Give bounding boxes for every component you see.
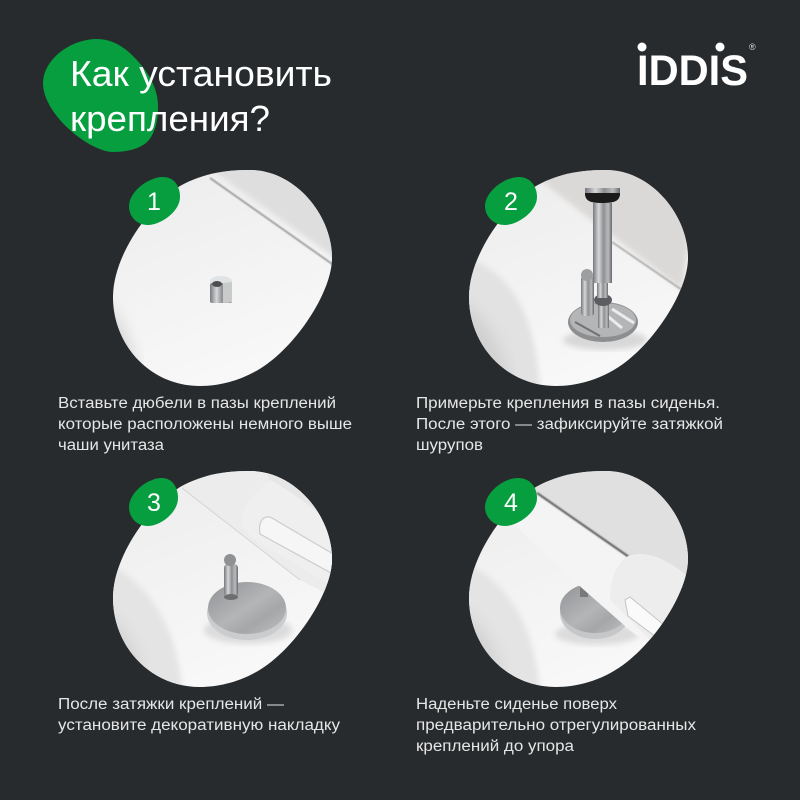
badge 1 [129, 177, 180, 225]
badge 1: 1 [147, 188, 161, 216]
title [43, 39, 332, 152]
photo: dowel on toilet rim [113, 170, 332, 386]
icon: screw [598, 302, 609, 328]
photo: seat fitted over fixing [469, 471, 688, 687]
icon: screwdriver [597, 282, 608, 298]
panel: step 4 [416, 465, 700, 755]
step 2 text: шурупов [416, 437, 483, 454]
icon: mounting plate [568, 302, 638, 342]
title text: крепления? [70, 98, 270, 139]
panel: step 3 [58, 465, 340, 734]
step 4 text: креплений до упора [416, 738, 574, 755]
badge 4: 4 [504, 489, 518, 517]
badge 2: 2 [504, 188, 518, 216]
logo: ® [749, 42, 756, 52]
panel: step 2 [416, 160, 723, 454]
photo: cover plate [113, 471, 332, 687]
icon: hinge [626, 554, 686, 640]
icon: round cover [560, 610, 625, 639]
step 2 text: Примерьте крепления в пазы сиденья. [416, 395, 720, 412]
step 2 text: После этого — зафиксируйте затяжкой [416, 416, 723, 433]
badge 2 [485, 177, 537, 225]
badge 3 [129, 478, 178, 526]
title text: Как установить [70, 53, 332, 94]
step 1 text: чаши унитаза [58, 437, 164, 454]
icon: hinge [267, 473, 332, 582]
badge 4 [485, 478, 537, 526]
upper surface [534, 471, 688, 589]
photo: screwdriver and fixing [469, 170, 688, 386]
title green blob [43, 39, 158, 152]
icon: post [581, 276, 594, 316]
panel: step 1 [58, 160, 352, 454]
icon: post [224, 564, 238, 597]
badge 3: 3 [147, 489, 161, 517]
step 3 text: установите декоративную накладку [58, 717, 340, 734]
step 4 text: Наденьте сиденье поверх [416, 696, 617, 713]
icon: dowel [210, 276, 232, 303]
step 1 text: Вставьте дюбели в пазы креплений [58, 395, 336, 412]
step 1 text: которые расположены немного выше [58, 416, 352, 433]
icon: round cover [207, 608, 287, 640]
icon: seat arm [579, 583, 638, 636]
logo: IDDIS [637, 47, 748, 95]
step 4 text: предварительно отрегулированных [416, 717, 696, 734]
step 3 text: После затяжки креплений — [58, 696, 285, 713]
